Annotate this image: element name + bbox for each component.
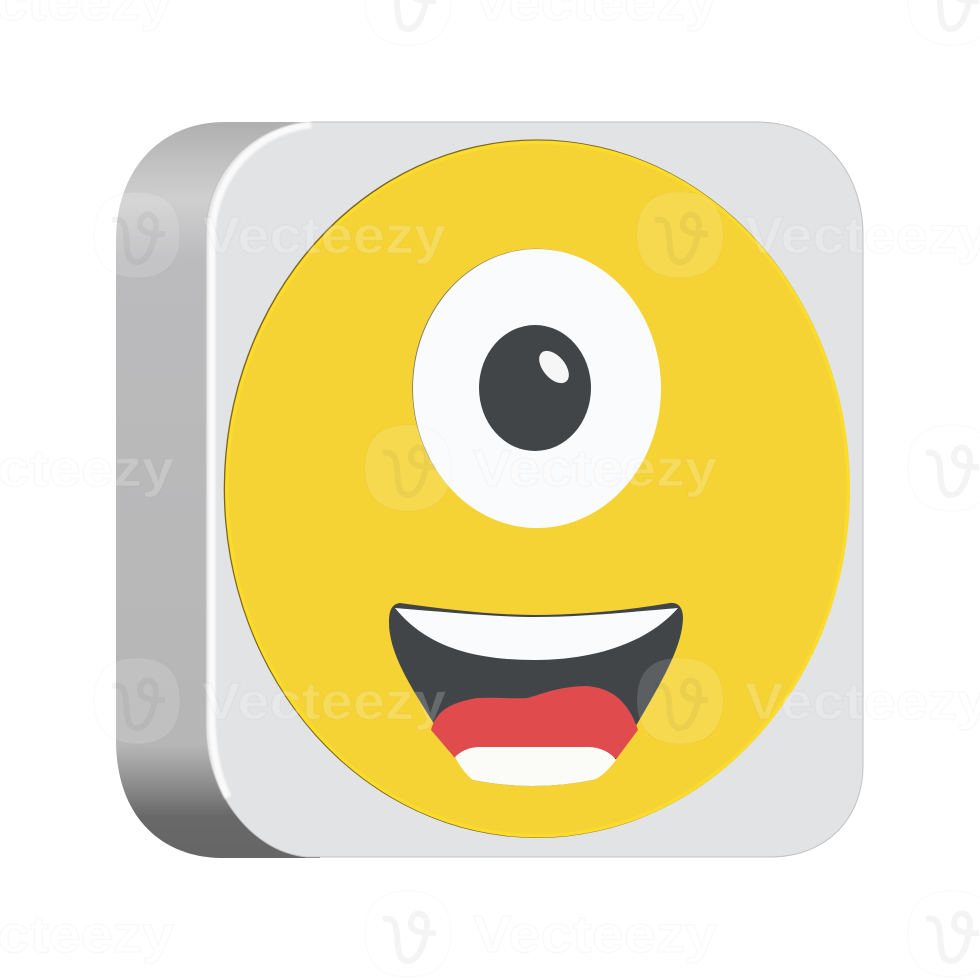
watermark row 5	[0, 891, 980, 977]
eye: white sclera with pupil and highlight	[412, 249, 661, 528]
watermark row 4: Vecteezy	[202, 673, 446, 731]
watermark row 2: Vecteezy	[745, 207, 980, 265]
watermark row 4	[94, 658, 980, 744]
watermark row 1	[0, 0, 980, 45]
watermark row 4: Vecteezy	[745, 673, 980, 731]
mouth: open smile	[389, 603, 683, 786]
upper teeth	[395, 608, 678, 660]
tongue	[431, 686, 638, 758]
lower teeth	[455, 747, 616, 786]
icon face: light rounded square	[206, 122, 863, 857]
mouth cavity	[389, 603, 683, 786]
watermark row 3	[0, 425, 980, 511]
watermark row 2	[94, 192, 980, 278]
watermark row 5: Vecteezy	[473, 906, 717, 964]
watermark row 2: Vecteezy	[202, 207, 446, 265]
emoji head: yellow oval	[224, 139, 850, 838]
watermark row 3: Vecteezy	[473, 440, 717, 498]
icon body: grey side wall	[116, 122, 320, 858]
